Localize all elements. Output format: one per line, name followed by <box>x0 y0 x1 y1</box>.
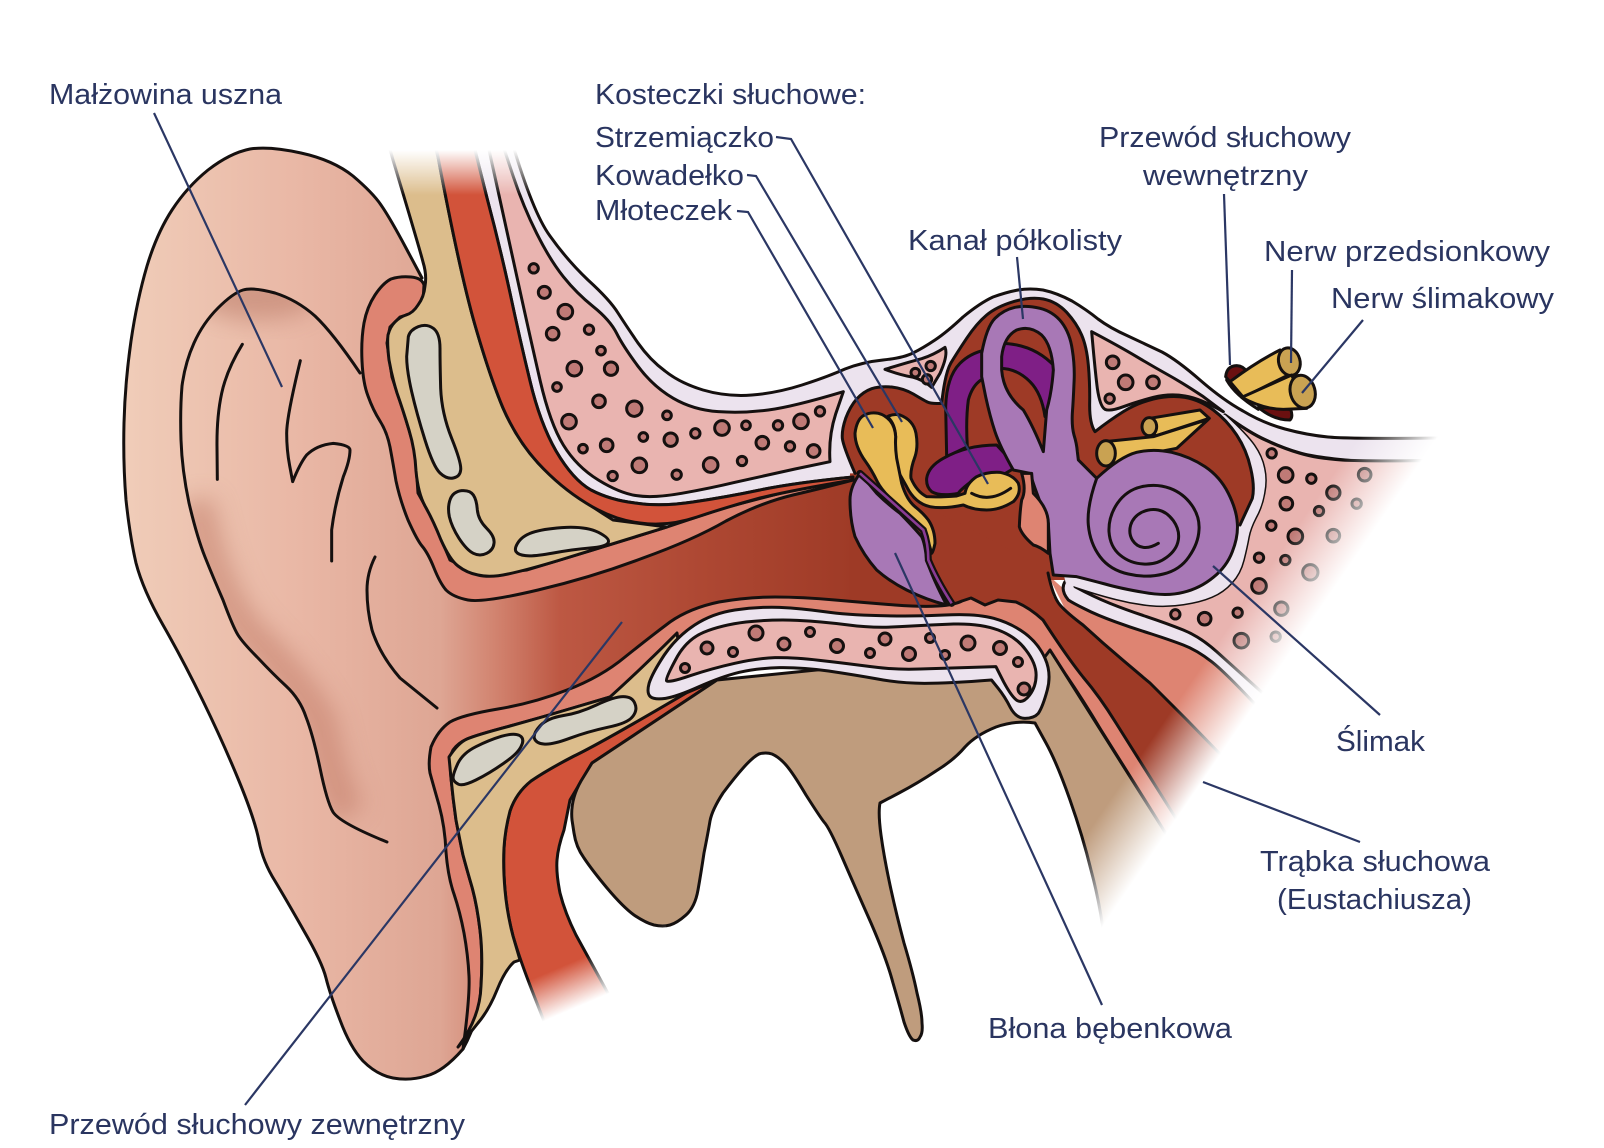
helix fold line <box>181 289 387 842</box>
grey cartilage pieces <box>407 325 609 556</box>
label: cochlear nerve: Nerw ślimakowy <box>1331 283 1555 315</box>
upper tan cartilage <box>386 135 667 576</box>
outer ear and ear canal <box>124 148 1330 1079</box>
label: stapes: Strzemiączko <box>595 122 774 154</box>
inner and middle ear <box>842 298 1253 605</box>
pores right <box>1171 449 1371 648</box>
label: eardrum: Błona bębenkowa <box>988 1013 1233 1045</box>
lower concha line <box>367 557 437 708</box>
malleus <box>855 413 935 553</box>
small pink bone triangle <box>885 347 946 387</box>
temporal bone lavender layer <box>470 125 1443 560</box>
nerve sheath arc <box>1227 380 1258 409</box>
edge fades <box>380 120 1604 1148</box>
upper nerve <box>1230 350 1292 397</box>
cochlea spiral <box>1088 478 1199 576</box>
label: internal auditory canal <box>1099 122 1352 192</box>
upper canal wall and cartilage <box>362 130 853 601</box>
label: vestibular nerve: Nerw przedsionkowy <box>1264 236 1551 268</box>
vestibule, semicircular canal and cochlea <box>982 306 1237 594</box>
leader lines <box>154 113 1380 1105</box>
semicircular canal dark purple <box>927 343 1055 495</box>
pocket pores <box>1105 356 1159 403</box>
label: Eustachian tube: (Eustachiusza) <box>1277 884 1472 916</box>
lower salmon rim <box>429 597 1177 1049</box>
label: cochlea: Ślimak <box>1336 724 1426 758</box>
label: Eustachian tube: Trąbka słuchowa <box>1260 846 1491 878</box>
bone pores <box>529 264 825 481</box>
lower canal wall, jaw bone and lower cartilage <box>429 597 1185 1062</box>
spongy bone above the canal <box>485 130 843 497</box>
lower red tissue <box>504 680 717 1062</box>
cavity fill above cochlear capsule <box>842 298 1253 588</box>
vestibulocochlear nerve bundle <box>1226 345 1319 420</box>
auricle outline <box>124 148 463 1079</box>
cochlear nerve tubes <box>1097 410 1209 466</box>
Eustachian tube right line <box>1048 573 1223 757</box>
cavity outline <box>842 298 1253 525</box>
lower band pores <box>680 626 1030 695</box>
auricle and canal skin fill <box>124 148 1260 1079</box>
upper red tissue <box>432 130 853 524</box>
eardrum membrane strip <box>860 473 952 603</box>
auricle fold lines <box>217 344 350 561</box>
upper salmon rim <box>362 277 853 601</box>
cochlear capsule <box>1050 387 1265 606</box>
label: ossicles heading: Kosteczki słuchowe: <box>595 79 866 111</box>
nerve sheath upper blob <box>1226 366 1247 384</box>
label: Eustachian tube <box>1260 846 1491 916</box>
label: auricle: Małżowina uszna <box>49 79 283 111</box>
spongy bone around the cochlea <box>1050 387 1483 787</box>
temporal bone brown <box>572 650 1185 1041</box>
right pink bone pocket <box>1092 332 1223 412</box>
lower lavender band <box>1063 580 1303 717</box>
eardrum <box>850 473 947 605</box>
label: malleus: Młoteczek <box>595 195 733 227</box>
shading inside the auricle <box>196 272 350 815</box>
label: external auditory canal: Przewód słuchowy zewnętrzny <box>49 1109 466 1141</box>
incus and stapes <box>887 414 1019 510</box>
nerve sheath lower blob <box>1258 407 1292 420</box>
lower nerve <box>1242 375 1307 409</box>
triangle pores <box>911 361 935 384</box>
pink bone <box>1075 415 1483 787</box>
lower bone band and grey cartilage <box>453 607 1049 785</box>
stapes inner line <box>972 488 1011 497</box>
label: internal auditory canal: Przewód słuchowy <box>1099 122 1352 154</box>
tissue beside Eustachian tube <box>1048 575 1330 810</box>
lower tan cartilage <box>449 633 686 1047</box>
label: semicircular canal: Kanał półkolisty <box>908 225 1123 257</box>
label: internal auditory canal: wewnętrzny <box>1142 160 1309 192</box>
label: incus: Kowadełko <box>595 160 744 192</box>
oval window block <box>1019 473 1048 553</box>
middle ear cavity fill <box>842 298 1253 630</box>
